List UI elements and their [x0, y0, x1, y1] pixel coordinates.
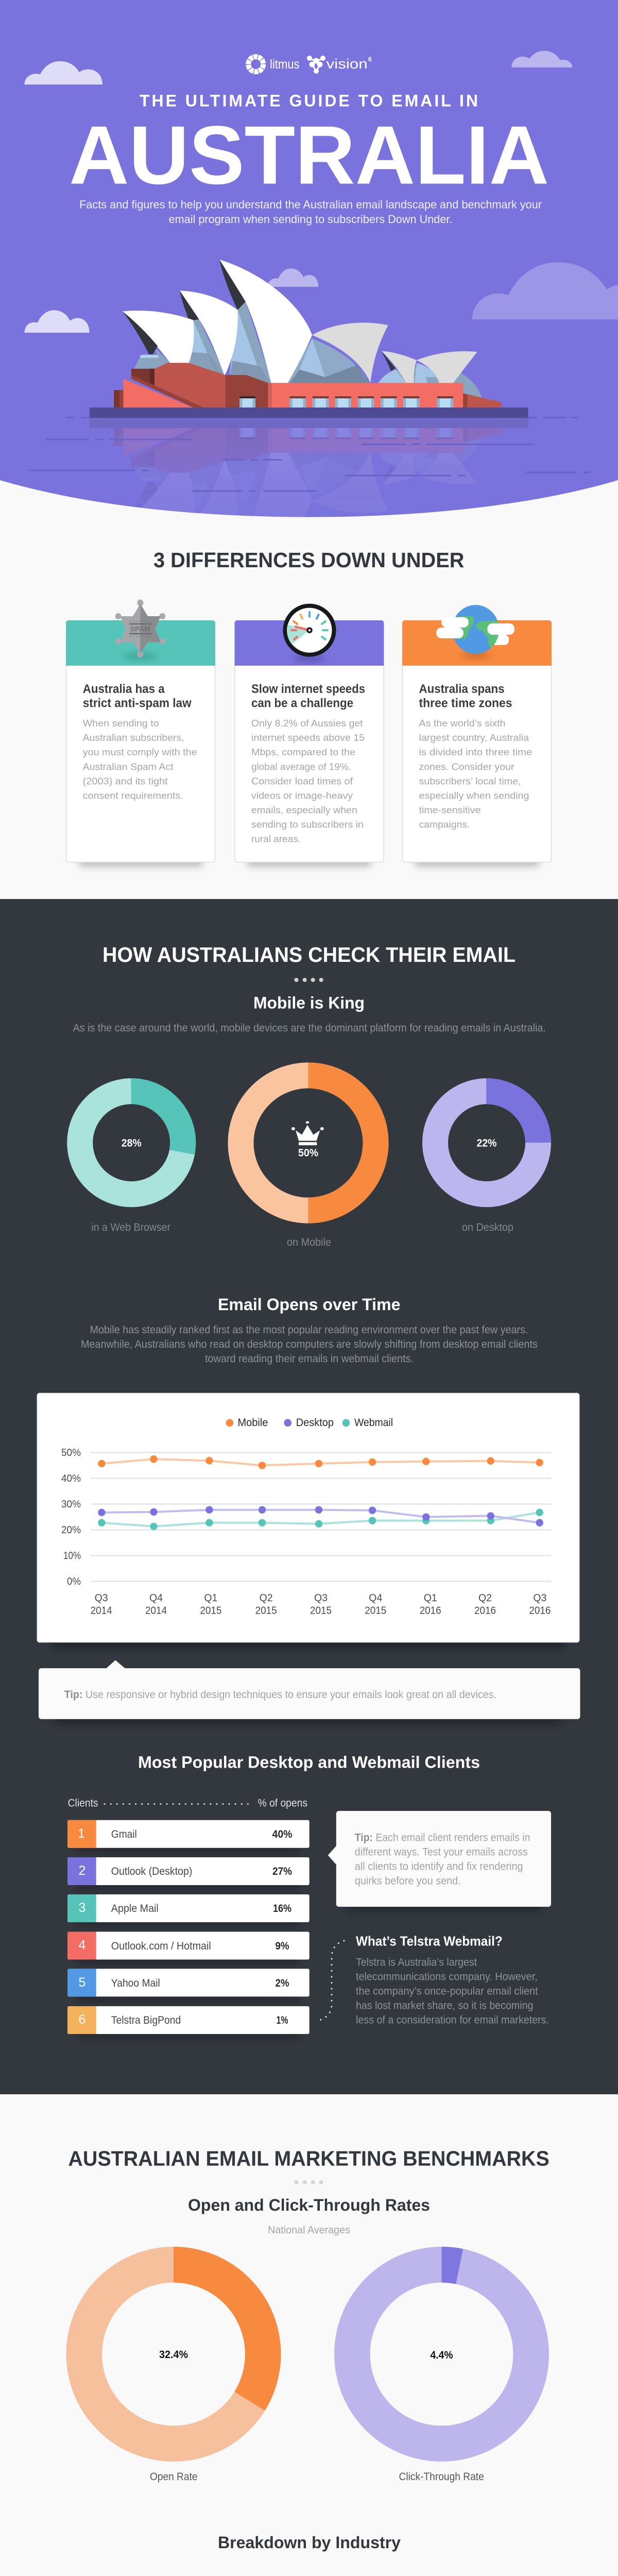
legend: Desktop: [296, 1417, 334, 1429]
x axis labels: 2014: [91, 1605, 112, 1617]
row 3 apple mail: 3: [79, 1901, 85, 1915]
card title: [251, 682, 365, 710]
row 3 apple mail: Apple Mail: [111, 1903, 159, 1914]
x axis labels: Q1: [424, 1592, 437, 1604]
y axis and grid: 40%: [61, 1472, 81, 1484]
logos: litmus and Vision6: [248, 56, 372, 73]
legend: [226, 1417, 393, 1429]
row 5 yahoo mail: Yahoo Mail: [111, 1977, 160, 1989]
subheading: mobile is king: Mobile is King: [253, 994, 365, 1012]
x axis labels: Q2: [478, 1592, 492, 1604]
card text: Only 8.2% of Aussies get: [251, 718, 363, 728]
arrow: dotted connector to Telstra note: [318, 1941, 344, 2021]
x axis labels: Q4: [369, 1592, 382, 1604]
x axis labels: Q2: [260, 1592, 273, 1604]
card text: (2003) and its tight: [83, 775, 168, 786]
card text: campaigns.: [419, 819, 470, 829]
chart: click-through rate donut: Click-Through Rate: [399, 2471, 484, 2483]
panel: email opens line chart: [37, 1393, 579, 1649]
chart: web browser donut: 28%: [122, 1138, 142, 1149]
callout: rendering tip: all clients to identify and fix rendering: [355, 1861, 523, 1873]
illustration reflection: [90, 418, 528, 513]
x axis labels: Q3: [533, 1592, 546, 1604]
illustration: Sydney Opera House: [90, 260, 528, 418]
caption: National Averages: [268, 2225, 350, 2236]
table: industry breakdown: [66, 2575, 551, 2576]
icon: globe with clouds: [436, 605, 514, 658]
row 1 gmail: Gmail: [111, 1828, 137, 1840]
callout: rendering tip: Tip: Each email client renders emails in: [355, 1832, 530, 1843]
panel: time zones card: [402, 605, 552, 867]
row 6 telstra bigpond: 1%: [276, 2014, 288, 2026]
card text: Mbps, compared to the: [251, 747, 355, 757]
card title: Australia spans: [419, 682, 505, 696]
card title: three time zones: [419, 697, 512, 710]
row 6 telstra bigpond: 6: [79, 2012, 85, 2027]
description: [81, 1324, 538, 1365]
legend: Webmail: [354, 1417, 393, 1429]
row 2 outlook desktop: [67, 1857, 310, 1890]
card text: subscribers’ local time,: [419, 775, 521, 786]
card text: Australian subscribers,: [83, 732, 184, 743]
callout: responsive tip: Tip: Use responsive or hybrid design techniques to ensure your emails look great on all devices.: [64, 1689, 496, 1701]
text block: what's Telstra webmail: What’s Telstra Webmail?: [356, 1933, 503, 1948]
text block: what's Telstra webmail: has lost market share, so it is becoming: [356, 2000, 533, 2011]
y axis and grid: [61, 1447, 551, 1587]
heading: Australian email marketing benchmarks: AUSTRALIAN EMAIL MARKETING BENCHMARKS: [68, 2147, 550, 2171]
chart: web browser donut: [80, 1091, 183, 1233]
x axis labels: Q3: [314, 1592, 328, 1604]
chart: desktop donut: 22%: [477, 1138, 497, 1149]
legend: Mobile: [238, 1417, 268, 1429]
x axis labels: Q3: [95, 1592, 108, 1604]
card text: Australian Spam Act: [83, 761, 174, 772]
description: toward reading their emails in webmail clients.: [205, 1353, 414, 1365]
callout: rendering tip: different ways. Test your emails across: [355, 1846, 528, 1858]
subheading: open and click-through rates: Open and Click-Through Rates: [188, 2196, 430, 2214]
x axis labels: 2016: [474, 1605, 496, 1617]
card text: zones. Consider your: [419, 761, 514, 772]
icon: crown: [291, 1121, 324, 1145]
row 3 apple mail: 16%: [273, 1903, 291, 1914]
series: mobile: [98, 1455, 543, 1469]
chart: click-through rate donut: [352, 2265, 531, 2483]
text block: what's Telstra webmail: less of a consideration for email marketers.: [356, 2014, 549, 2026]
water ripple lines: [28, 417, 590, 492]
description: As is the case around the world, mobile devices are the dominant platform for reading emails in Australia.: [73, 1022, 546, 1034]
logos: litmus and Vision6: 6: [368, 56, 372, 63]
x axis labels: Q4: [149, 1592, 163, 1604]
row 3 apple mail: [67, 1894, 310, 1927]
intro text: email program when sending to subscribers Down Under.: [169, 213, 452, 226]
row 1 gmail: 40%: [272, 1828, 293, 1840]
card text: rural areas.: [251, 834, 301, 844]
x axis labels: 2016: [420, 1605, 441, 1617]
y axis and grid: 50%: [61, 1447, 81, 1459]
card text: sending to subscribers in: [251, 819, 364, 829]
x axis labels: 2016: [529, 1605, 551, 1617]
chart: web browser donut: in a Web Browser: [92, 1222, 170, 1233]
row 5 yahoo mail: 2%: [275, 1977, 289, 1989]
dots divider: [295, 2180, 323, 2184]
x axis labels: [91, 1592, 551, 1617]
table header: Clients: [68, 1798, 98, 1809]
callout: responsive tip: [39, 1660, 580, 1725]
row 4 outlook.com: [67, 1932, 310, 1964]
row 5 yahoo mail: 5: [79, 1975, 85, 1990]
y axis and grid: 10%: [63, 1550, 81, 1562]
series: desktop: [98, 1506, 543, 1527]
row 2 outlook desktop: 2: [79, 1863, 85, 1878]
row 6 telstra bigpond: Telstra BigPond: [111, 2014, 181, 2026]
card text: [251, 718, 365, 844]
table: email clients ranking: [67, 1798, 310, 2039]
row 1 gmail: 1: [78, 1826, 85, 1841]
description: Meanwhile, Australians who read on desktop computers are slowly shifting from desktop email clients: [81, 1338, 538, 1350]
row 4 outlook.com: 4: [79, 1938, 86, 1953]
chart: desktop donut: on Desktop: [462, 1222, 513, 1233]
text block: what's Telstra webmail: Telstra is Australia’s largest: [356, 1956, 477, 1968]
y axis and grid: 20%: [61, 1524, 81, 1536]
row 2 outlook desktop: Outlook (Desktop): [111, 1866, 192, 1877]
row 6 telstra bigpond: [67, 2006, 310, 2039]
chart: open rate donut: 32.4%: [159, 2349, 188, 2361]
x axis labels: 2015: [365, 1605, 386, 1617]
panel: hero header: [0, 0, 618, 517]
card title: can be a challenge: [251, 697, 353, 710]
title: AUSTRALIA: [69, 109, 549, 202]
y axis and grid: 0%: [67, 1575, 81, 1587]
description: Mobile has steadily ranked first as the most popular reading environment over the past few years.: [90, 1324, 528, 1336]
clouds: [24, 51, 618, 333]
row 2 outlook desktop: 27%: [272, 1866, 292, 1877]
card text: Consider load times of: [251, 775, 353, 786]
callout: rendering tip: quirks before you send.: [355, 1875, 461, 1887]
card text: you must comply with the: [83, 747, 197, 757]
card text: [419, 718, 533, 829]
card text: internet speeds above 15: [251, 732, 365, 743]
icon: sheriff spam badge: SPAM: [130, 624, 150, 633]
text block: what's Telstra webmail: telecommunications company. However,: [356, 1971, 538, 1982]
text block: what's Telstra webmail: [356, 1933, 549, 2026]
chart: open rate donut: Open Rate: [150, 2471, 197, 2483]
card text: consent requirements.: [83, 790, 183, 801]
x axis labels: 2015: [310, 1605, 332, 1617]
chart: mobile donut: 50%: [298, 1147, 318, 1159]
card text: is divided into three time: [419, 747, 533, 757]
title: THE ULTIMATE GUIDE TO EMAIL IN: [140, 92, 478, 110]
callout: rendering tip: [328, 1811, 551, 1911]
chart: mobile donut: [241, 1075, 376, 1248]
y axis and grid: 30%: [61, 1498, 81, 1510]
table header: [68, 1798, 307, 1809]
card text: videos or image-heavy: [251, 790, 353, 801]
series: webmail: [98, 1509, 543, 1530]
panel: slow internet card: [235, 606, 384, 867]
logos: litmus and Vision6: litmus: [270, 57, 300, 72]
card text: When sending to: [83, 718, 159, 728]
card title: [419, 682, 512, 710]
x axis labels: 2015: [200, 1605, 221, 1617]
chart: mobile donut: on Mobile: [287, 1236, 331, 1248]
subheading: most popular clients: Most Popular Desktop and Webmail Clients: [138, 1753, 480, 1772]
card text: emails, especially when: [251, 805, 357, 815]
row 4 outlook.com: Outlook.com / Hotmail: [111, 1940, 211, 1952]
card text: As the world’s sixth: [419, 718, 506, 728]
x axis labels: 2014: [145, 1605, 167, 1617]
panel: dark section background: [0, 899, 618, 2094]
card title: Slow internet speeds: [251, 682, 365, 696]
card text: especially when sending: [419, 790, 529, 801]
card text: global average of 19%.: [251, 761, 351, 772]
intro text: Facts and figures to help you understand the Australian email landscape and benchmark your: [79, 198, 542, 211]
card text: largest country, Australia: [419, 732, 529, 743]
heading: 3 differences down under: 3 DIFFERENCES DOWN UNDER: [153, 548, 465, 572]
row 5 yahoo mail: [67, 1969, 310, 2002]
text block: what's Telstra webmail: the company’s once-popular email client: [356, 1985, 538, 1997]
x axis labels: 2015: [255, 1605, 277, 1617]
chart: desktop donut: [435, 1091, 538, 1233]
panel: anti-spam law card: [66, 600, 215, 867]
row 4 outlook.com: 9%: [275, 1940, 289, 1952]
x axis labels: Q1: [204, 1592, 217, 1604]
logos: litmus and Vision6: vision: [327, 56, 368, 72]
heading: how Australians check their email: HOW AUSTRALIANS CHECK THEIR EMAIL: [102, 943, 516, 967]
chart: open rate donut: [84, 2265, 263, 2483]
card text: [83, 718, 197, 801]
icon: speed gauge: [283, 606, 334, 662]
table header: % of opens: [258, 1798, 307, 1809]
subheading: breakdown by industry: Breakdown by Industry: [218, 2533, 401, 2552]
card text: time-sensitive: [419, 805, 481, 815]
subheading: email opens over time: Email Opens over Time: [218, 1295, 401, 1314]
intro text: [79, 198, 542, 226]
chart: click-through rate donut: 4.4%: [431, 2349, 453, 2361]
card title: [83, 682, 192, 710]
dots divider: [295, 978, 323, 982]
icon: sheriff spam badge: [115, 600, 165, 660]
card title: Australia has a: [83, 682, 165, 696]
row 1 gmail: [67, 1820, 310, 1853]
card title: strict anti-spam law: [83, 697, 192, 710]
